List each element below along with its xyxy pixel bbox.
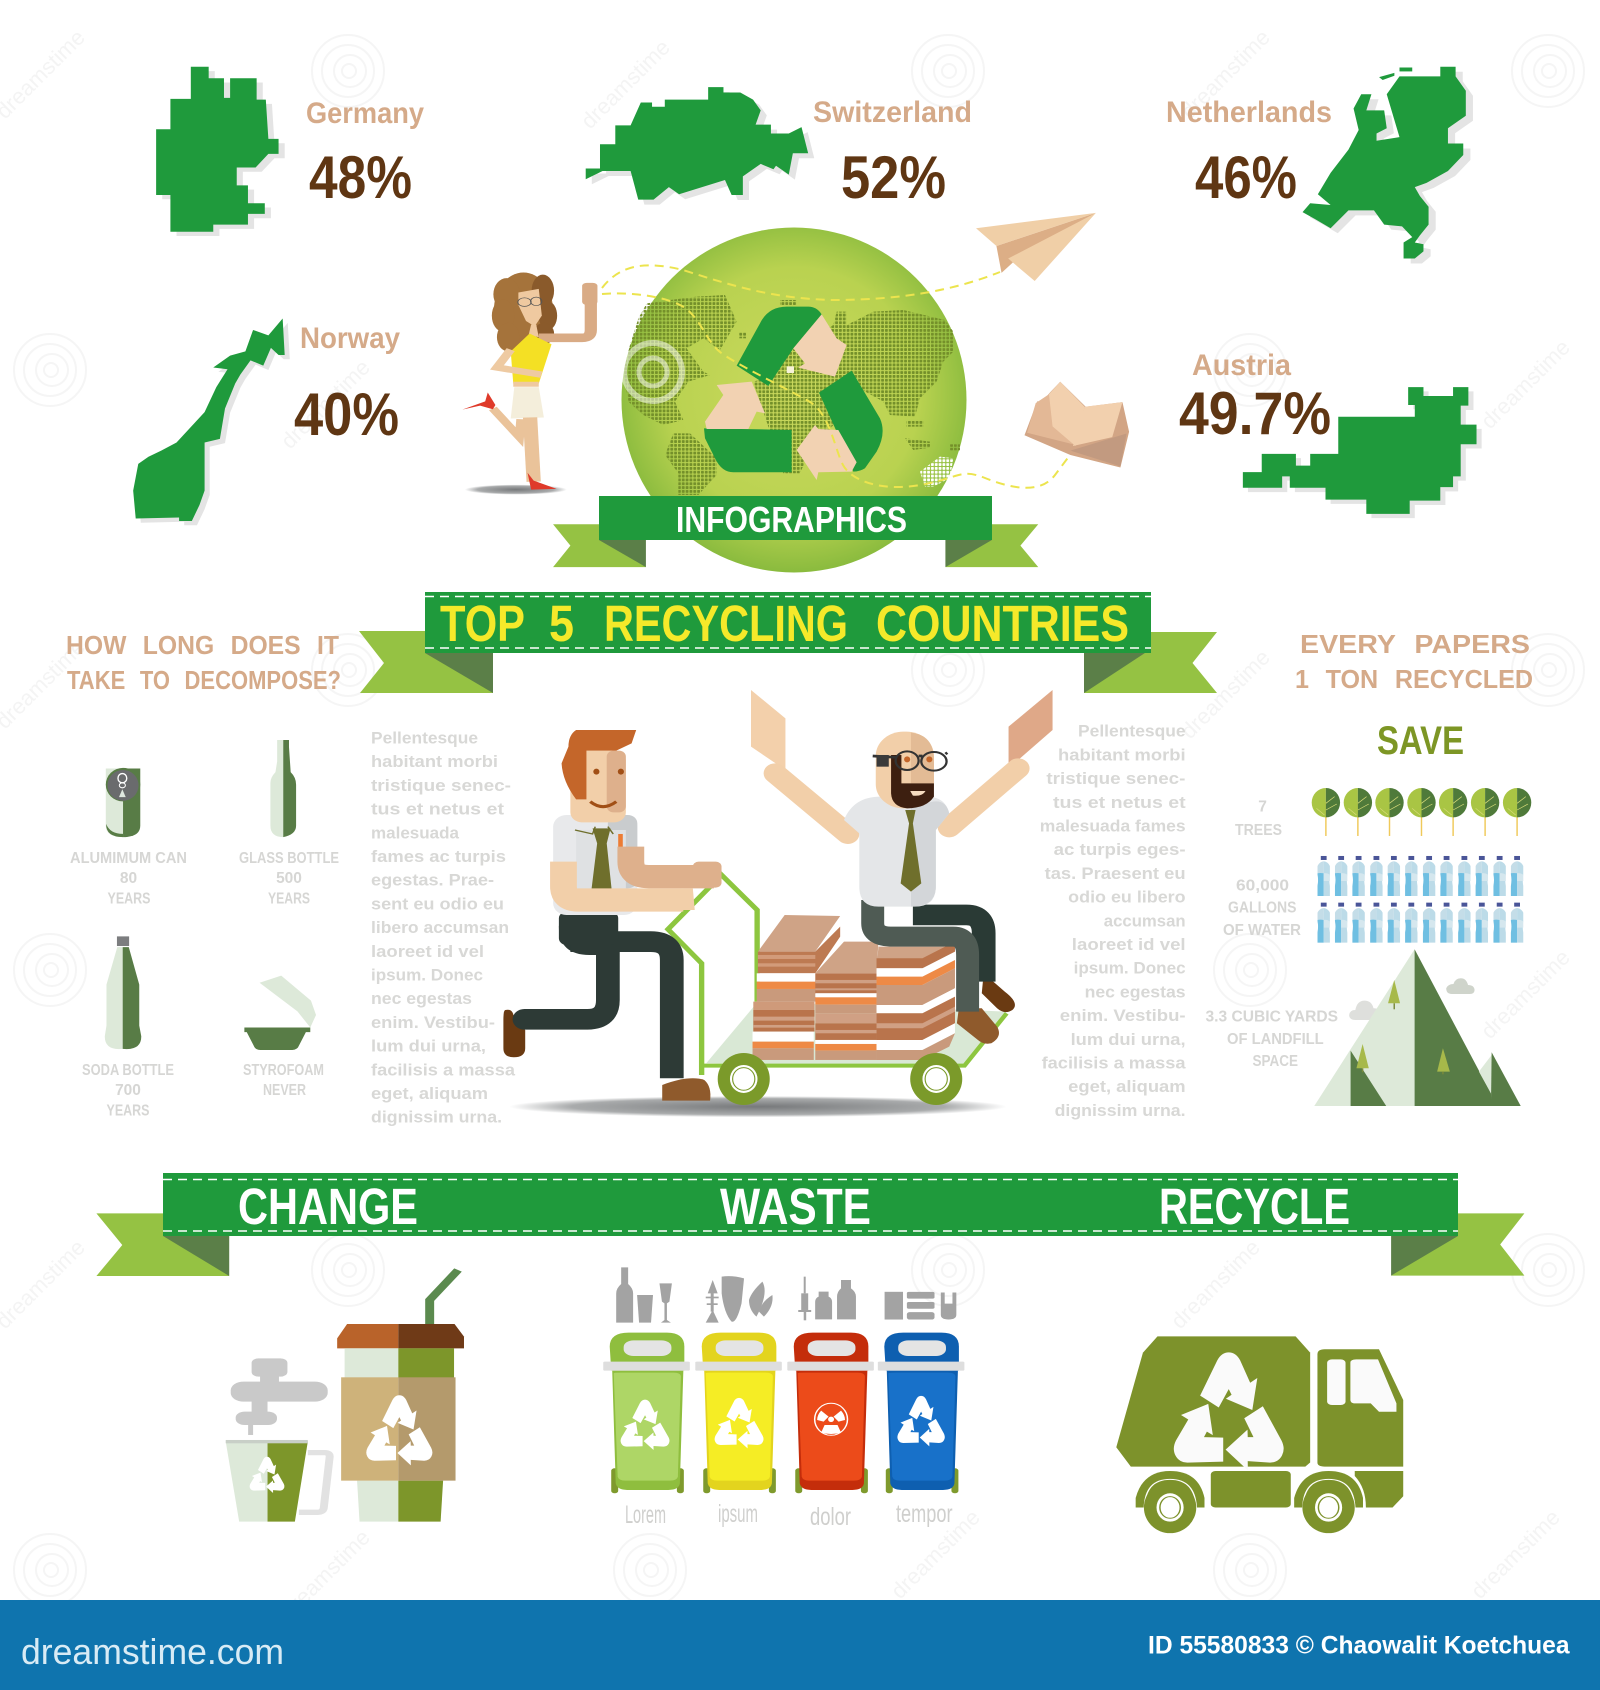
heading: TAKE TO DECOMPOSE? [67, 665, 341, 695]
text block: left paragraph: habitant morbi [371, 752, 498, 771]
panel: how long does it take to decompose [66, 630, 341, 1120]
item: soda bottle: 700 [115, 1082, 141, 1099]
bin: tempor: tempor [896, 1500, 952, 1528]
stat: 3.3 cubic yards of landfill space: OF LANDFILL [1227, 1031, 1324, 1048]
watermark spirals: dreamstime [1466, 1505, 1565, 1604]
country: Austria [1179, 349, 1482, 518]
item: aluminium can [70, 768, 187, 908]
banner: INFOGRAPHICS: INFOGRAPHICS [676, 499, 907, 540]
icon: open book [1024, 382, 1129, 467]
country: Norway [133, 319, 400, 525]
country: Norway: Norway [300, 322, 400, 355]
heading [66, 630, 341, 695]
watermark spirals: dreamstime [1176, 645, 1275, 744]
country: Norway: 40% [294, 381, 399, 448]
footer bar [0, 1600, 1600, 1690]
text block: left paragraph: enim. Vestibu- [371, 1013, 495, 1032]
item: aluminium can: ALUMIMUM CAN [70, 850, 187, 867]
bin: ipsum [695, 1333, 782, 1528]
bin: dolor: dolor [810, 1503, 851, 1531]
text block: right paragraph: enim. Vestibu- [1060, 1006, 1186, 1025]
banner: top 5 recycling countries: COUNTRIES [876, 595, 1129, 652]
banner: INFOGRAPHICS [553, 496, 1038, 567]
banner: change waste recycle: RECYCLE [1159, 1178, 1350, 1235]
stat: 3.3 cubic yards of landfill space [1206, 949, 1521, 1106]
illustration: two men with paper cart [503, 690, 1053, 1117]
text block: left paragraph: nec egestas [371, 989, 472, 1008]
text block: left paragraph: facilisis a massa [371, 1060, 516, 1079]
recycle symbol [704, 307, 883, 480]
text block: left paragraph: eget, aliquam [371, 1084, 488, 1103]
ground shadow [509, 1096, 1007, 1117]
panel: every papers 1 ton recycled save [1206, 629, 1533, 1106]
bin: lorem: Lorem [625, 1501, 666, 1529]
stat: 60,000 gallons of water: GALLONS [1228, 900, 1296, 917]
text block: right paragraph: nec egestas [1085, 982, 1186, 1001]
watermark spirals: dreamstime [1476, 945, 1575, 1044]
illustration: woman [462, 272, 597, 495]
item: soda bottle: YEARS [106, 1102, 150, 1120]
stat: 60,000 gallons of water: 60,000 [1236, 878, 1289, 895]
text block: right paragraph: tas. Praesent eu [1045, 864, 1186, 883]
text block: right paragraph: lum dui urna, [1071, 1030, 1186, 1049]
text block: left paragraph: laoreet id vel [371, 942, 484, 961]
country: Switzerland: Switzerland [813, 96, 972, 129]
bin: tempor [878, 1333, 964, 1528]
text block: left paragraph: libero accumsan [371, 918, 509, 937]
cart [668, 875, 1007, 1075]
text block: right paragraph: ipsum. Donec [1074, 959, 1186, 978]
bin: dolor [787, 1333, 874, 1531]
text block: right paragraph: habitant morbi [1058, 745, 1186, 764]
text block: right paragraph: tristique senec- [1046, 769, 1185, 788]
heading: EVERY PAPERS [1300, 629, 1530, 659]
footer bar: ID 55580833 © Chaowalit Koetchuea [1148, 1632, 1571, 1660]
country: Switzerland: 52% [841, 144, 946, 211]
item: soda bottle: SODA BOTTLE [82, 1062, 174, 1079]
item: aluminium can: YEARS [108, 890, 150, 908]
man sitting with raised papers [751, 690, 1053, 1044]
item: soda bottle [82, 936, 174, 1120]
country: Germany [156, 67, 424, 236]
item: styrofoam: STYROFOAM [243, 1062, 324, 1079]
stat: 7 trees: 7 [1258, 799, 1267, 816]
icon: recycling truck [1116, 1336, 1403, 1533]
bin: lorem [603, 1333, 690, 1529]
banner: top 5 recycling countries: TOP [440, 595, 525, 652]
text block: left paragraph: Pellentesque [371, 728, 478, 748]
country: Netherlands: Netherlands [1166, 96, 1332, 129]
cart wheels [718, 1053, 962, 1105]
bin: ipsum: ipsum [718, 1500, 758, 1528]
text block: right paragraph: malesuada fames [1040, 816, 1186, 836]
text block: right paragraph: eget, aliquam [1068, 1077, 1186, 1096]
watermark spirals: dreamstime [576, 35, 675, 134]
banner: change waste recycle: WASTE [720, 1178, 871, 1235]
country: Austria: 49.7% [1179, 380, 1331, 447]
watermark spirals: dreamstime [276, 1525, 375, 1624]
text block: left paragraph: fames ac turpis [371, 847, 506, 866]
banner: top 5 recycling countries: RECYCLING [604, 595, 848, 652]
stat: 3.3 cubic yards of landfill space: SPACE [1252, 1053, 1298, 1070]
panel: top 5 country maps and rates [133, 67, 1482, 525]
stat: 60,000 gallons of water: OF WATER [1223, 922, 1301, 939]
paper stacks [753, 915, 955, 1060]
globe sphere [622, 228, 966, 572]
text block: right paragraph: laoreet id vel [1072, 935, 1186, 954]
text block: left paragraph: dignissim urna. [371, 1108, 502, 1127]
stat: 7 trees: TREES [1235, 822, 1282, 839]
text block: right paragraph: tus et netus et [1053, 793, 1186, 812]
watermark spirals: dreamstime [886, 1505, 985, 1604]
item: styrofoam [243, 976, 324, 1099]
country: Austria: Austria [1192, 349, 1291, 382]
banner: top 5 recycling countries: 5 [549, 595, 574, 652]
country: Switzerland [586, 87, 972, 211]
text block: left paragraph: tristique senec- [371, 776, 511, 795]
waste type icons [616, 1267, 856, 1323]
man pushing cart [503, 730, 722, 1101]
icon: paper plane [976, 213, 1096, 281]
watermark spirals: dreamstime [1176, 25, 1275, 124]
text block: left paragraph: tus et netus et [371, 800, 504, 819]
text block: left paragraph: sent eu odio eu [371, 894, 504, 913]
item: glass bottle: GLASS BOTTLE [239, 850, 339, 867]
save label: SAVE [1377, 719, 1464, 763]
country: Germany: 48% [309, 144, 412, 211]
item: aluminium can: 80 [120, 870, 137, 887]
icon: tap [231, 1358, 328, 1435]
stat: 3.3 cubic yards of landfill space: 3.3 CUBIC YARDS [1206, 1009, 1338, 1026]
illustration: recycling globe [462, 213, 1129, 572]
text block: left paragraph: ipsum. Donec [371, 966, 483, 984]
text block: right paragraph [1040, 722, 1186, 1120]
heading: HOW LONG DOES IT [66, 630, 339, 660]
item: styrofoam: NEVER [263, 1082, 306, 1099]
text block: right paragraph: ac turpis eges- [1054, 840, 1186, 859]
illustration: reusable cups and tap [226, 1270, 464, 1522]
illustration: sorted waste bins [603, 1267, 964, 1531]
item: glass bottle: 500 [276, 870, 302, 887]
country: Netherlands: 46% [1195, 144, 1297, 211]
text block: right paragraph: dignissim urna. [1055, 1101, 1186, 1120]
footer bar: dreamstime.com [21, 1631, 284, 1672]
text block: left paragraph: malesuada [371, 823, 460, 842]
country: Netherlands [1166, 67, 1473, 264]
banner: change waste recycle [96, 1173, 1524, 1276]
dotted world map [623, 295, 960, 495]
watermark swirl on globe [624, 343, 682, 401]
watermark spirals: dreamstime [1476, 335, 1575, 434]
stat: 7 trees [1235, 788, 1531, 839]
text block: left paragraph: lum dui urna, [371, 1037, 486, 1056]
text block: right paragraph: accumsan [1104, 911, 1186, 930]
item: glass bottle [239, 740, 339, 908]
item: glass bottle: YEARS [268, 890, 310, 908]
text block: right paragraph: Pellentesque [1078, 722, 1186, 741]
heading: 1 TON RECYCLED [1295, 664, 1533, 694]
stat: 60,000 gallons of water [1223, 856, 1523, 943]
text block: right paragraph: odio eu libero [1068, 888, 1186, 907]
country: Germany: Germany [306, 97, 424, 130]
watermark spirals: dreamstime [276, 355, 375, 454]
banner: change waste recycle: CHANGE [238, 1178, 418, 1235]
watermark spirals: dreamstime [1166, 1235, 1265, 1334]
text block: left paragraph [371, 728, 516, 1127]
icon: takeaway cup [337, 1270, 464, 1522]
icon: small cup [226, 1440, 330, 1522]
banner: top 5 recycling countries [359, 592, 1217, 693]
dashed flight paths [602, 265, 1070, 488]
text block: right paragraph: facilisis a massa [1042, 1054, 1186, 1072]
heading [1295, 629, 1533, 694]
text block: left paragraph: egestas. Prae- [371, 871, 494, 890]
